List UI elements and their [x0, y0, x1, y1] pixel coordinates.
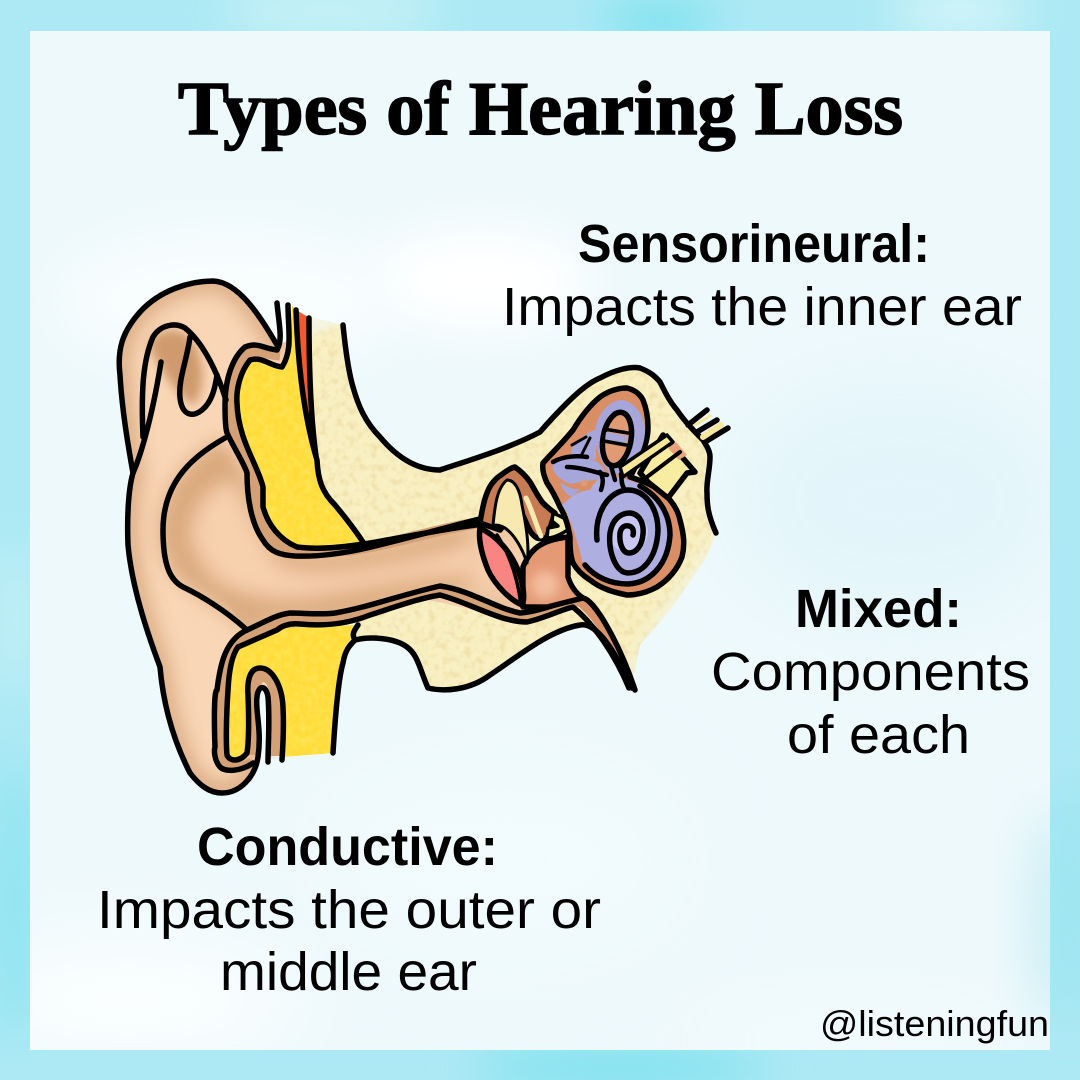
- label: conductive: Impacts the outer or: [97, 880, 601, 940]
- upper fat layer: [240, 306, 360, 546]
- outer ear skin: [119, 281, 527, 793]
- label: conductive: [97, 817, 601, 1002]
- cavity highlight: [531, 571, 559, 599]
- middle ear cavity: [523, 537, 583, 607]
- label: mixed: Components: [711, 642, 1030, 702]
- eardrum: [479, 528, 524, 605]
- label: conductive: Conductive:: [197, 817, 498, 877]
- label: sensorineural: Impacts the inner ear: [502, 277, 1022, 337]
- inner ear membrane: [543, 388, 684, 595]
- ossicles: [480, 467, 572, 563]
- inner ear: vestibule and semicircular canals: [552, 400, 670, 582]
- title: Types of Hearing Loss: [178, 67, 903, 151]
- credit handle: @listeningfun: [820, 1003, 1049, 1044]
- label: mixed: Mixed:: [795, 579, 962, 639]
- label: sensorineural: [502, 214, 1022, 337]
- label: conductive: middle ear: [220, 942, 477, 1002]
- ear outlines: [119, 281, 716, 793]
- bone tissue: [312, 317, 715, 688]
- label: mixed: of each: [787, 705, 970, 765]
- red muscle strip: [296, 310, 317, 462]
- nerve bundle: [620, 410, 728, 498]
- label: mixed: [711, 579, 1030, 765]
- notch cut-out: [257, 688, 269, 762]
- lower fat layer: [229, 625, 354, 758]
- skin layer strips: [220, 351, 627, 767]
- cochlea: [585, 486, 670, 584]
- ear diagram: [119, 281, 740, 793]
- label: sensorineural: Sensorineural:: [578, 214, 930, 274]
